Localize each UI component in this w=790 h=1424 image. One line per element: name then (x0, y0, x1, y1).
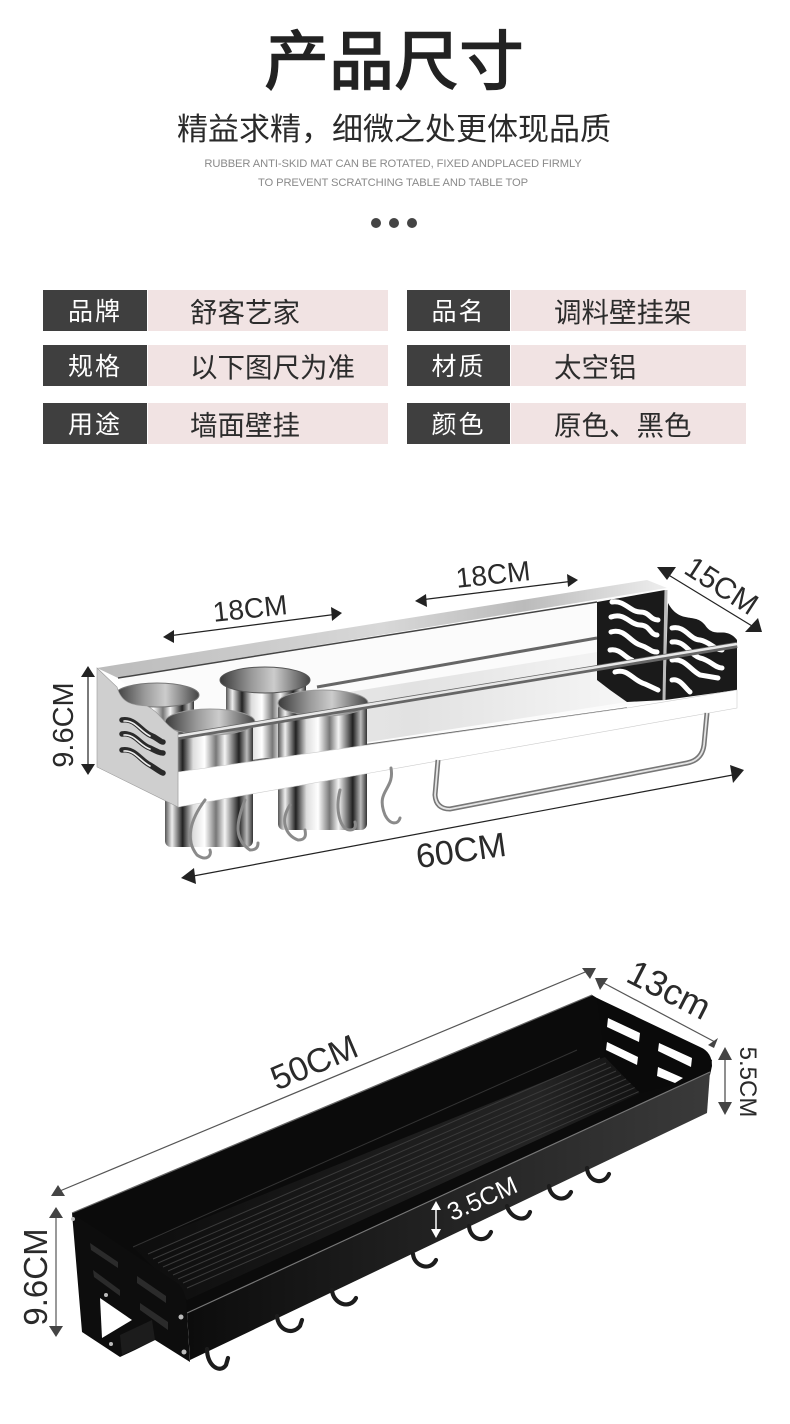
steel rack (97, 580, 737, 858)
dimension: 13cm (595, 951, 718, 1048)
row label: product name (407, 290, 510, 331)
english caption: TO PREVENT SCRATCHING TABLE AND TABLE TOP (258, 177, 528, 189)
left end panel (72, 1213, 190, 1362)
right end wall with wave slots (597, 590, 737, 702)
row value: usage (148, 403, 388, 444)
row value: brand (148, 290, 388, 331)
floor ribs (148, 1058, 640, 1288)
dimension: 18CM right (415, 555, 578, 607)
dimension: 60CM: 60CM (414, 826, 509, 876)
row value: material (511, 345, 746, 386)
row value: product name (511, 290, 746, 331)
row label: material (407, 345, 510, 386)
row label: size: 规格 (68, 353, 122, 381)
dimension: 5.5CM (718, 1047, 761, 1117)
dimension: 18CM left: 18CM (211, 589, 289, 628)
left end panel with wave slots (97, 668, 178, 807)
row label: size (43, 345, 147, 386)
row value: product name: 调料壁挂架 (554, 297, 692, 328)
end panel right (597, 998, 712, 1093)
dimension: 18CM right: 18CM (454, 555, 532, 594)
front band (178, 690, 737, 807)
row label: colour: 颜色 (431, 411, 486, 439)
row value: material: 太空铝 (554, 352, 636, 383)
row label: product name: 品名 (431, 298, 486, 326)
row label: material: 材质 (431, 353, 486, 381)
dimension: 50CM: 50CM (265, 1028, 364, 1098)
row value: colour (511, 403, 746, 444)
dimension: 9.6CM black: 9.6CM (17, 1228, 54, 1326)
dimension: 15CM: 15CM (679, 551, 764, 622)
back panel and floor (118, 590, 665, 772)
screws (71, 1217, 186, 1354)
row label: brand: 品牌 (68, 298, 122, 326)
spec table (43, 290, 746, 444)
row value: colour: 原色、黑色 (554, 410, 692, 441)
dimension: 3.5CM: 3.5CM (443, 1171, 522, 1227)
row value: usage: 墙面壁挂 (190, 410, 300, 441)
dimension: 5.5CM: 5.5CM (734, 1047, 761, 1117)
dimension: 9.6CM steel (48, 666, 95, 775)
black rack (71, 995, 712, 1369)
towel bar (435, 713, 707, 809)
dimension: 15CM (657, 551, 764, 632)
three dots (371, 218, 417, 228)
row label: usage (43, 403, 147, 444)
cups (115, 667, 368, 847)
dimension: 9.6CM black (17, 1207, 63, 1337)
english caption: RUBBER ANTI-SKID MAT CAN BE ROTATED, FIXED ANDPLACED FIRMLY (204, 158, 582, 170)
cutout and bracket (100, 1298, 155, 1355)
row value: size (148, 345, 388, 386)
interior back wall (72, 995, 712, 1313)
row label: brand (43, 290, 147, 331)
row value: size: 以下图尺为准 (190, 352, 355, 383)
english caption (204, 158, 582, 189)
interior floor (133, 1057, 640, 1300)
dimension: 13cm: 13cm (621, 951, 718, 1028)
subtitle: 精益求精，细微之处更体现品质 (177, 112, 611, 147)
dimension: 9.6CM steel: 9.6CM (48, 682, 80, 768)
top rim (97, 580, 667, 678)
front rail (178, 644, 737, 737)
hooks (190, 768, 400, 858)
row label: colour (407, 403, 510, 444)
right wall slots (606, 1018, 692, 1083)
front panel (187, 1072, 710, 1360)
left panel slots (90, 1243, 168, 1330)
row value: brand: 舒客艺家 (190, 297, 300, 328)
dimension: 50CM (51, 968, 596, 1196)
floor seam (133, 1050, 577, 1247)
row label: usage: 用途 (68, 411, 122, 439)
dimension: 60CM (181, 765, 744, 884)
hooks (207, 1168, 609, 1369)
title: 产品尺寸 (264, 25, 524, 98)
dimension: 18CM left (163, 589, 342, 643)
